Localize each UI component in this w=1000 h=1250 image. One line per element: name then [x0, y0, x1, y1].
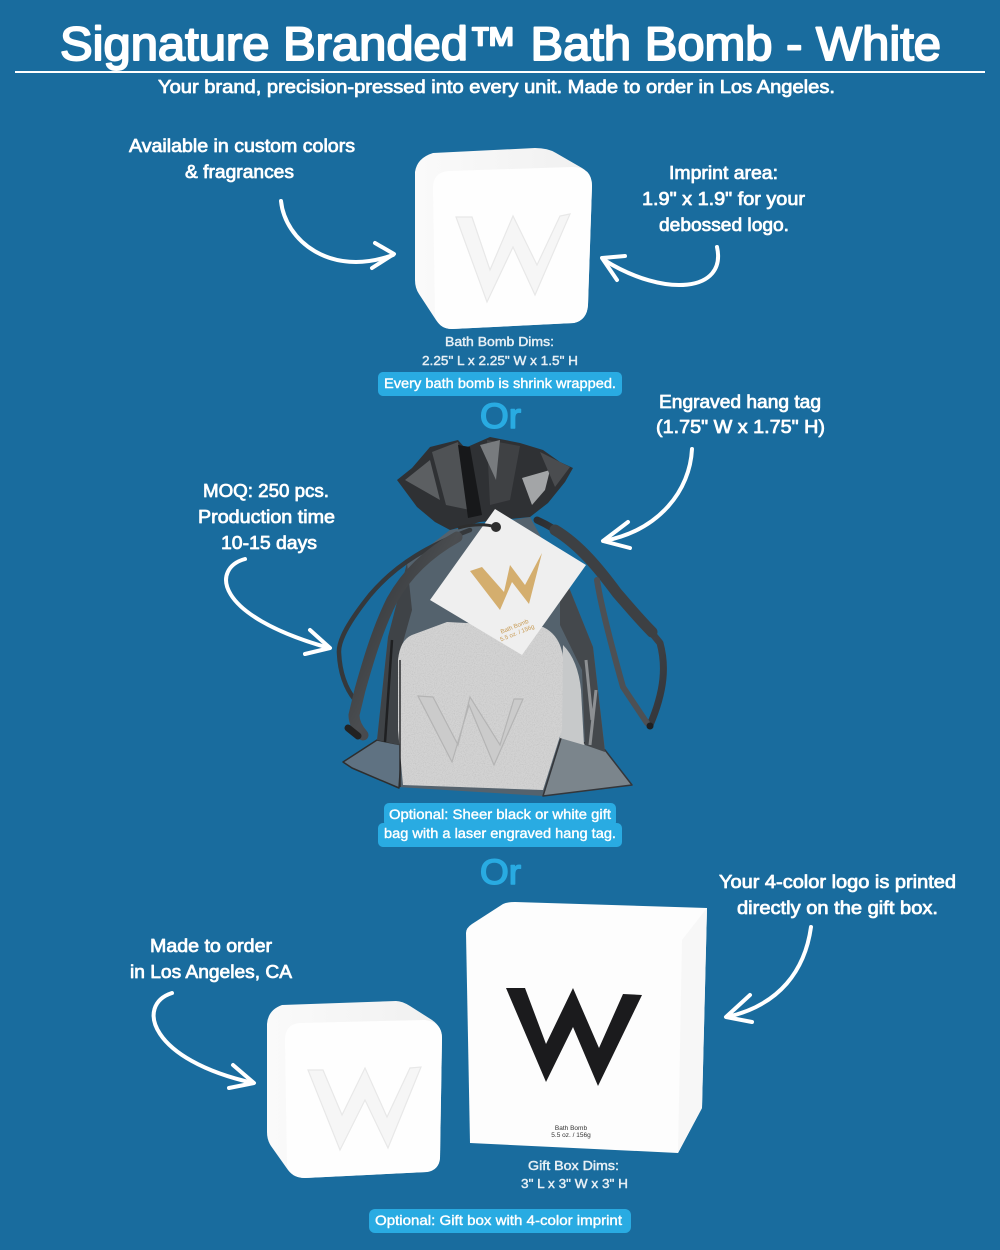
Or divider 1: Or — [480, 397, 521, 436]
callout: made to order: Made to order — [150, 936, 272, 956]
subtitle: Your brand, precision-pressed into every unit. Made to order in Los Angeles. — [158, 77, 835, 97]
callout: hang tag — [656, 392, 825, 437]
callout: made to order: in Los Angeles, CA — [130, 962, 292, 982]
Or divider 2: Or — [480, 853, 521, 892]
bath bomb dimensions: 2.25" L x 2.25" W x 1.5" H — [422, 353, 578, 368]
icon: gift box — [466, 902, 707, 1153]
pill: gift box option — [369, 1209, 631, 1233]
gift box dimensions: Gift Box Dims: — [528, 1158, 619, 1173]
callout: 4-color logo: directly on the gift box. — [737, 898, 938, 918]
box weight text — [551, 1125, 591, 1139]
callout: custom colors: Available in custom colors — [129, 136, 355, 156]
callout: imprint area: debossed logo. — [659, 215, 789, 235]
callout: 4-color logo: Your 4-color logo is printed — [719, 872, 956, 892]
pill: shrink wrapped — [378, 372, 622, 396]
hang tag — [430, 509, 586, 655]
pill: gift bag option: bag with a laser engraved hang tag. — [384, 825, 616, 841]
arrow: hang tag — [603, 449, 692, 548]
ruffled bag top — [397, 437, 573, 530]
left ribbon — [339, 530, 470, 736]
debossed W on bagged bomb — [418, 696, 523, 765]
bag bottom flaps — [343, 740, 402, 788]
bath bomb dimensions — [422, 334, 578, 368]
tag weight text — [497, 618, 535, 643]
box weight text: 5.5 oz. / 156g — [551, 1132, 591, 1139]
bath bomb dimensions: Bath Bomb Dims: — [445, 334, 554, 349]
pill: gift bag option: Optional: Sheer black or white gift — [389, 806, 611, 822]
right ribbon — [537, 520, 663, 730]
callout: custom colors: & fragrances — [185, 162, 294, 182]
arrow: logo to gift box — [726, 927, 811, 1022]
gold W — [470, 553, 542, 610]
callout: custom colors — [129, 136, 355, 182]
bomb inside bag — [398, 622, 563, 790]
sheer side panels — [560, 570, 605, 752]
icon: bath bomb top — [415, 148, 592, 329]
icon: sheer gift bag with bath bomb — [339, 437, 663, 796]
title: Signature Branded™ Bath Bomb - White — [60, 17, 941, 70]
bag body back — [343, 517, 632, 796]
callout: hang tag: (1.75" W x 1.75" H) — [656, 417, 825, 437]
pill: gift bag option — [378, 803, 622, 847]
pill: shrink wrapped: Every bath bomb is shrink wrapped. — [384, 375, 616, 391]
arrow: MOQ to bag — [226, 559, 330, 654]
callout: MOQ: Production time — [198, 507, 335, 527]
gift box dimensions: 3" L x 3" W x 3" H — [521, 1176, 628, 1191]
callout: 4-color logo — [719, 872, 956, 918]
debossed W — [456, 214, 570, 302]
box weight text: Bath Bomb — [555, 1125, 587, 1132]
callout: imprint area — [642, 163, 805, 235]
arrow: made to order to bomb — [154, 993, 254, 1088]
callout: MOQ — [198, 481, 335, 553]
arrow: custom colors to bath bomb — [281, 201, 394, 268]
callout: imprint area: Imprint area: — [669, 163, 778, 183]
callout: imprint area: 1.9" x 1.9" for your — [642, 189, 805, 209]
tag weight text: 5.5 oz. / 156g — [500, 624, 535, 643]
callout: hang tag: Engraved hang tag — [659, 392, 821, 412]
callout: MOQ: MOQ: 250 pcs. — [203, 481, 329, 501]
pill: gift box option: Optional: Gift box with 4-color imprint — [375, 1212, 622, 1228]
callout: made to order — [130, 936, 292, 982]
debossed W — [308, 1067, 421, 1150]
icon: bath bomb bottom — [267, 1001, 442, 1178]
tag weight text: Bath Bomb — [500, 619, 530, 636]
callout: MOQ: 10-15 days — [221, 533, 317, 553]
gift box dimensions — [521, 1158, 628, 1191]
black W logo — [506, 988, 642, 1086]
arrow: imprint area to bath bomb — [602, 247, 718, 285]
